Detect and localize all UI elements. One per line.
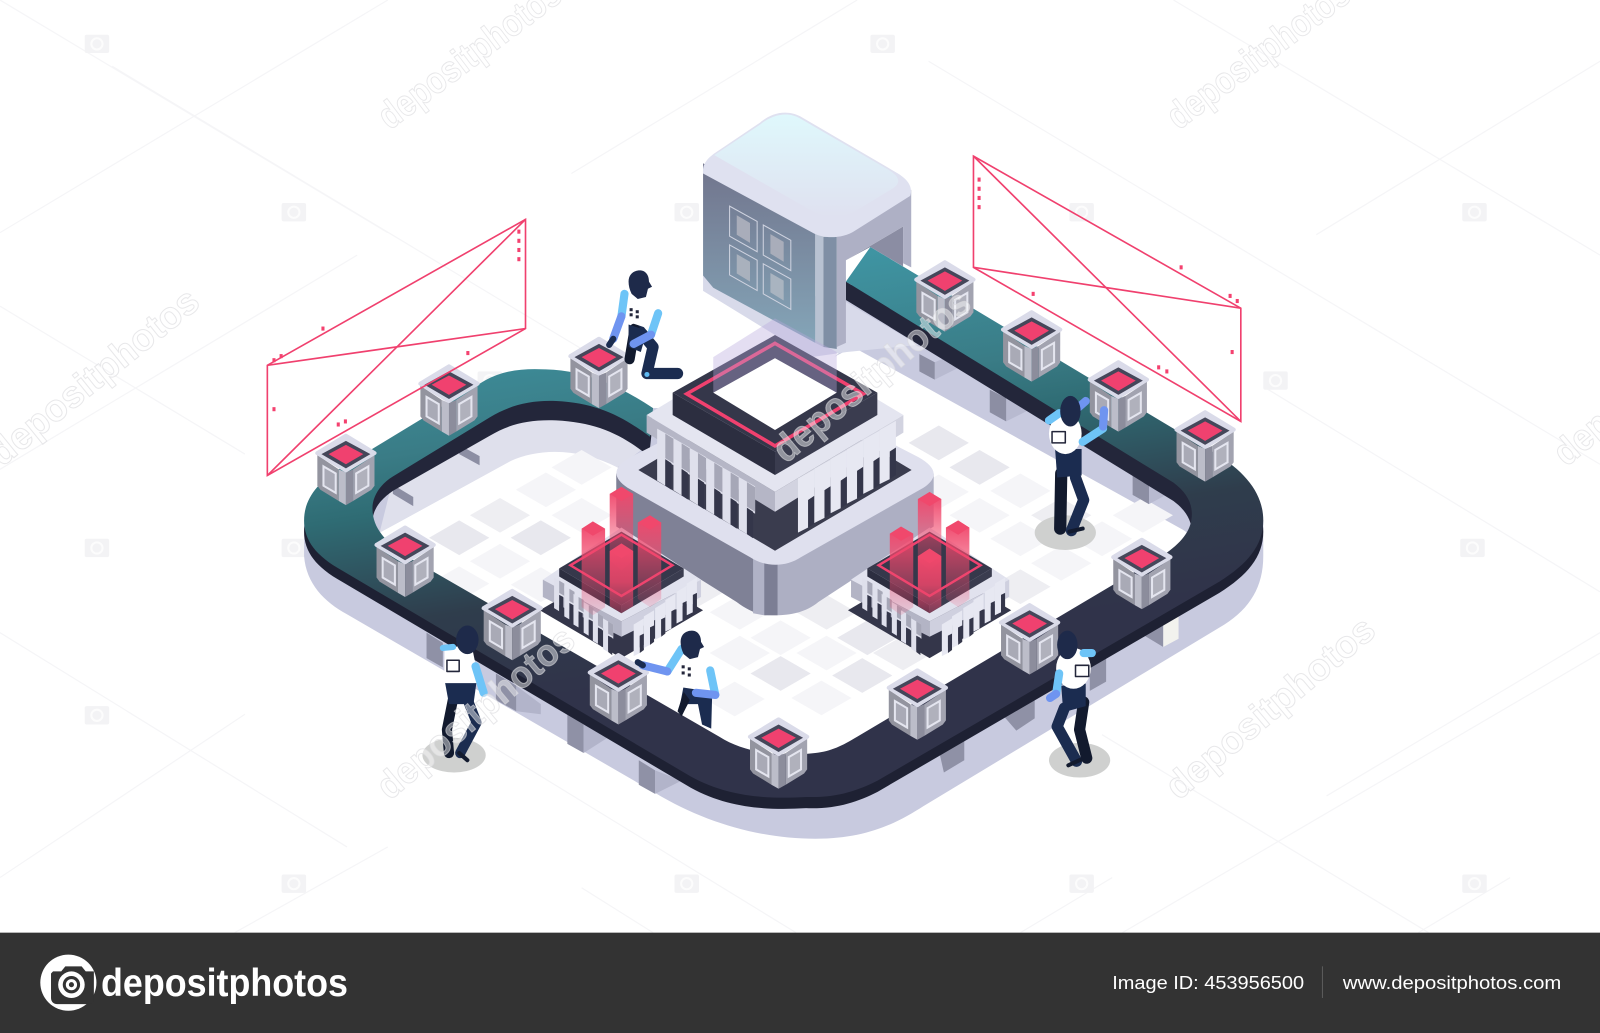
floor tiles [429,426,1173,716]
worker lower-right shadow [1049,743,1110,778]
belt supports [393,352,1179,794]
cubes on belt [317,262,1234,789]
chip white window [713,358,837,430]
conveyor belt surface [304,247,1263,798]
diagonal watermarks: depositphotos [1157,608,1383,807]
logo icon [40,955,96,1011]
worker right shadow [1035,515,1096,550]
worker bottom-left [443,626,484,760]
small chip left [540,487,703,658]
main chip [616,318,934,615]
gate panel squares [730,206,791,309]
platform base [304,247,1263,839]
worker right reaching to cube [1049,396,1104,532]
chip top frame [673,393,775,475]
chip base block [647,415,775,512]
holographic panel right [973,156,1241,421]
gate top [703,113,911,237]
gate opening interior [846,227,903,266]
gate floor shadow [703,276,918,357]
diagonal watermarks [0,0,1600,807]
robot with outstretched arm [638,631,715,729]
gate left face [703,163,815,343]
logo wordmark: depositphotos [101,962,348,1005]
bars [890,492,969,615]
chip socket [638,389,912,551]
gate housing [703,113,911,349]
chip platform sides [616,473,934,615]
website url: www.depositphotos.com [1342,972,1561,993]
holographic panel left [267,219,526,476]
white floor [380,347,1193,776]
inner lilac crescent [380,410,650,533]
diagonal watermarks: depositphotos [368,618,583,807]
small chip right [848,492,1011,658]
footer band [0,933,1600,1033]
worker lower-right [1050,631,1092,765]
image id: Image ID: 453956500 [1112,972,1304,993]
watermark camera icons [85,35,1487,893]
chip pins right [798,421,896,533]
chip platform top [616,384,934,565]
worker bottom-left shadow [422,738,486,772]
robot kneeling [609,270,678,377]
bars [582,487,661,615]
chip pins left [657,429,755,538]
gate right face [837,190,911,347]
diagonal watermarks: depositphotos [764,281,978,470]
conveyor belt side [304,258,1263,809]
